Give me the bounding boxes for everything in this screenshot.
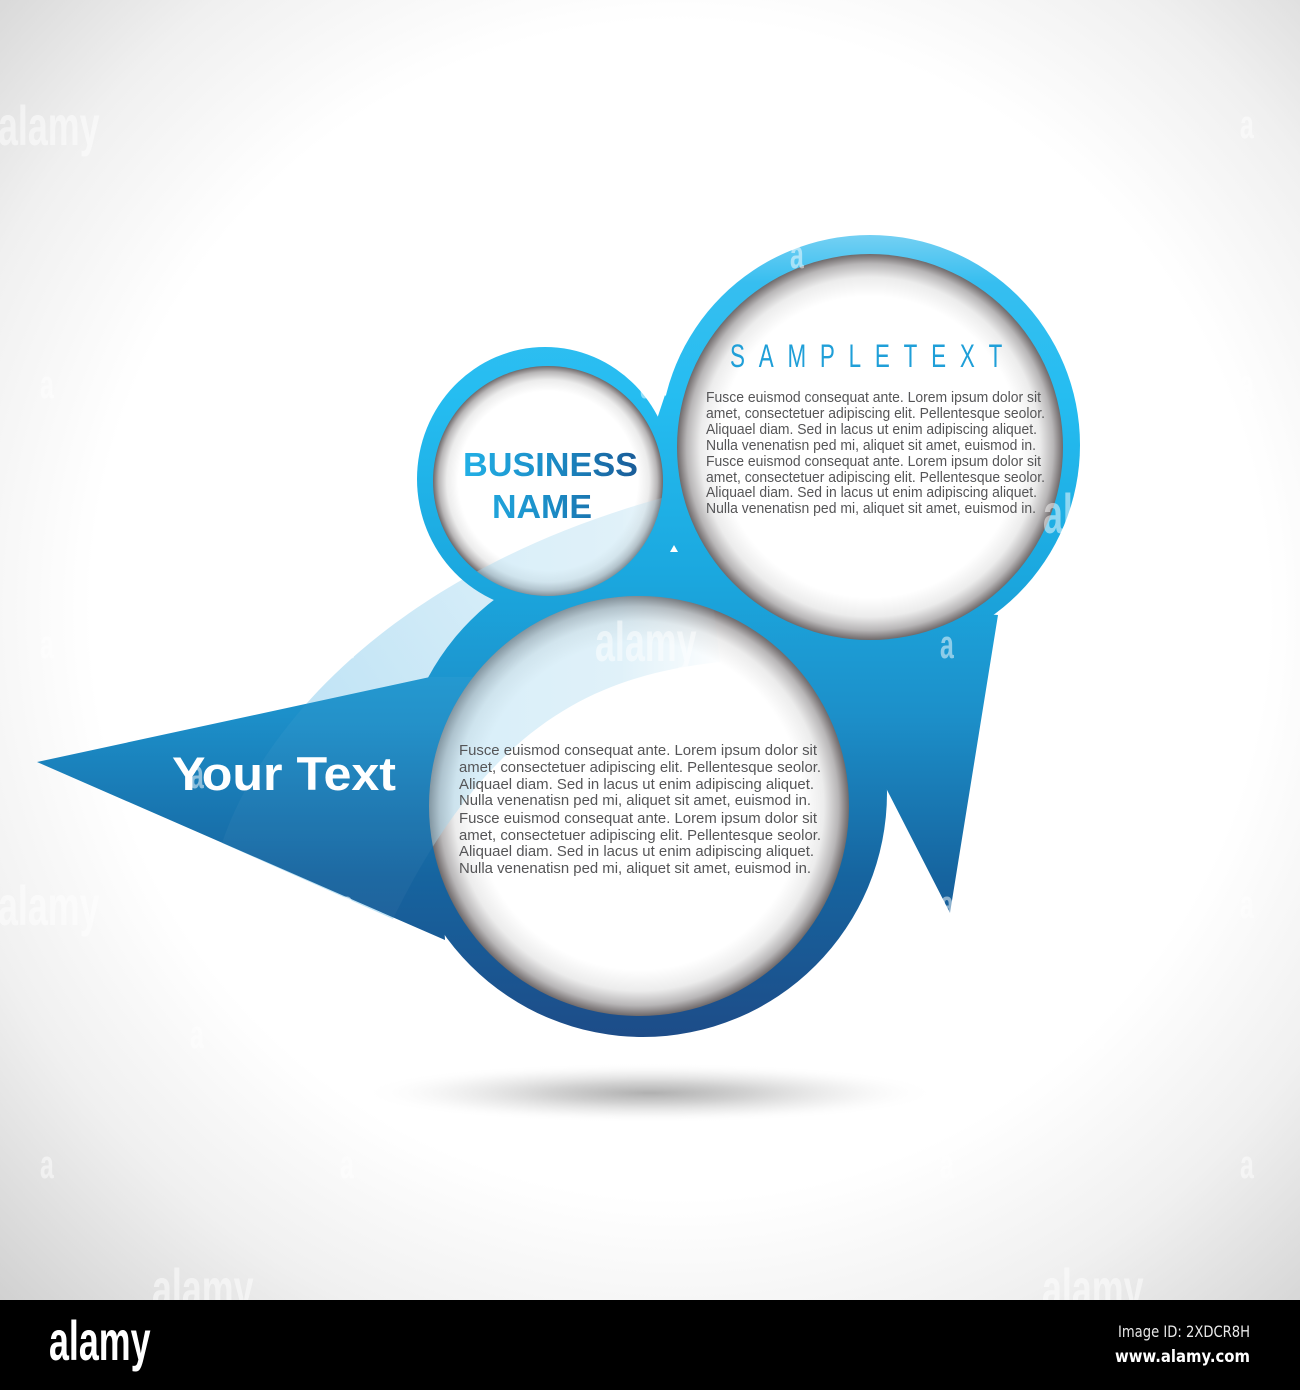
paragraph: sample text: amet, consectetuer adipiscing elit. Pellentesque seolor.: [706, 469, 1045, 486]
watermarks: a: [340, 623, 354, 668]
paragraph: lower text: Aliquael diam. Sed in lacus ut enim adipiscing aliquet.: [459, 776, 814, 793]
watermarks: a: [640, 363, 654, 408]
heading: business name: NAME: [492, 488, 592, 525]
watermarks: alamy: [890, 94, 992, 157]
watermarks: a: [1240, 1143, 1254, 1188]
watermarks: a: [190, 233, 204, 278]
watermarks: a: [1090, 233, 1104, 278]
watermarks: a: [1240, 363, 1254, 408]
watermarks: a: [340, 103, 354, 148]
ground shadow: [360, 1063, 940, 1123]
paragraph: lower text: Nulla venenatisn ped mi, aliquet sit amet, euismod in.: [459, 792, 811, 809]
paragraph: sample text: Nulla venenatisn ped mi, aliquet sit amet, euismod in.: [706, 437, 1036, 454]
watermarks: a: [190, 1013, 204, 1058]
watermarks: a: [340, 1143, 354, 1188]
watermarks: alamy: [0, 874, 100, 937]
swoosh seen through circles: [429, 498, 709, 846]
footer bar: [0, 1300, 1300, 1390]
paragraph: lower text: Fusce euismod consequat ante. Lorem ipsum dolor sit: [459, 742, 818, 759]
paragraph: sample text: Fusce euismod consequat ante. Lorem ipsum dolor sit: [706, 453, 1042, 470]
paragraph: lower text: Nulla venenatisn ped mi, aliquet sit amet, euismod in.: [459, 860, 811, 877]
paragraph: sample text: Aliquael diam. Sed in lacus ut enim adipiscing aliquet.: [706, 484, 1037, 501]
watermarks: a: [340, 883, 354, 928]
watermarks: alamy: [1042, 1257, 1144, 1320]
watermarks: a: [1240, 883, 1254, 928]
paragraph: sample text: Nulla venenatisn ped mi, aliquet sit amet, euismod in.: [706, 500, 1036, 517]
watermarks: a: [940, 623, 954, 668]
circle: lower text: [429, 498, 849, 1016]
watermarks: alamy: [152, 1257, 254, 1320]
watermarks: a: [790, 233, 804, 278]
paragraph: lower text: [459, 742, 821, 877]
blue speech-bubble shape: [37, 235, 1080, 1037]
heading: sample text: SAMPLETEXT: [730, 338, 1002, 374]
watermarks: a: [40, 623, 54, 668]
arrow label: your text: Your Text: [172, 747, 396, 800]
watermarks: alamy: [1043, 482, 1145, 545]
heading: business name: [463, 446, 638, 525]
paragraph: sample text: [706, 389, 1045, 517]
watermarks: alamy: [0, 94, 100, 157]
paragraph: lower text: Fusce euismod consequat ante. Lorem ipsum dolor sit: [459, 810, 818, 827]
watermarks: a: [940, 1143, 954, 1188]
watermarks: a: [1240, 103, 1254, 148]
footer logo: alamy: [49, 1309, 151, 1372]
watermarks: a: [40, 363, 54, 408]
paragraph: sample text: Aliquael diam. Sed in lacus ut enim adipiscing aliquet.: [706, 421, 1037, 438]
watermarks: a: [190, 753, 204, 798]
paragraph: sample text: amet, consectetuer adipiscing elit. Pellentesque seolor.: [706, 405, 1045, 422]
watermarks: a: [1090, 1013, 1104, 1058]
translucent swoosh behind shape: [222, 488, 720, 919]
heading: business name: BUSINESS: [463, 446, 638, 483]
watermarks: alamy: [595, 610, 697, 673]
circle: business name: [433, 366, 663, 596]
footer image id: Image ID: 2XDCR8H: [1118, 1322, 1250, 1341]
paragraph: lower text: amet, consectetuer adipiscing elit. Pellentesque seolor.: [459, 827, 821, 844]
small white gap triangle: [670, 545, 678, 552]
paragraph: lower text: Aliquael diam. Sed in lacus ut enim adipiscing aliquet.: [459, 843, 814, 860]
watermarks: a: [940, 883, 954, 928]
watermarks: a: [40, 1143, 54, 1188]
circle: sample text: [677, 254, 1063, 640]
paragraph: sample text: Fusce euismod consequat ante. Lorem ipsum dolor sit: [706, 389, 1042, 406]
paragraph: lower text: amet, consectetuer adipiscing elit. Pellentesque seolor.: [459, 759, 821, 776]
footer url: www.alamy.com: [1115, 1347, 1250, 1367]
swoosh highlight over arrow: [222, 488, 720, 919]
